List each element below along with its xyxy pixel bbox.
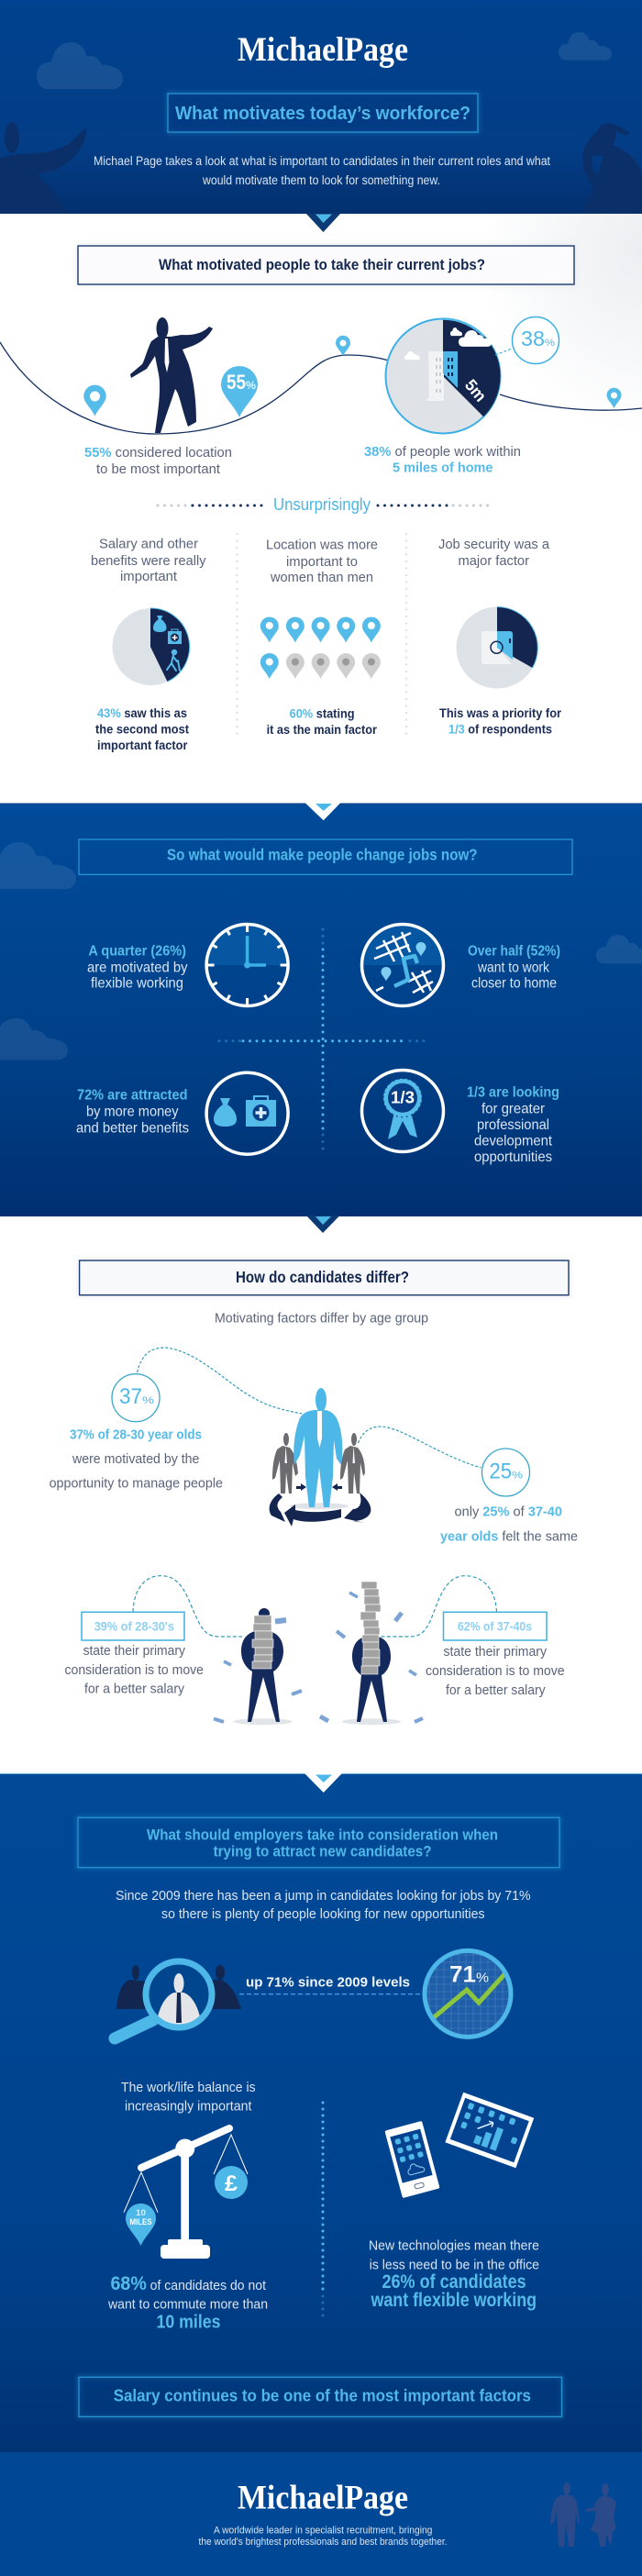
logo: MichaelPage	[238, 31, 408, 69]
icon: balance scales	[124, 2128, 248, 2259]
icon: small pin left	[83, 385, 106, 416]
text: 68% commute	[107, 2273, 268, 2332]
figure: man with small stack	[234, 1608, 293, 1725]
icon: money bag	[153, 616, 167, 632]
callout: 37%: 37	[119, 1384, 142, 1409]
text: 37% caption	[50, 1427, 223, 1492]
icon: walker	[167, 650, 180, 671]
arrow: into section	[305, 803, 340, 820]
chart: 71% growth circle: 71	[449, 1962, 476, 1988]
chart: security pie 1/3	[457, 607, 537, 688]
panel: what should employers consider	[0, 1773, 642, 2452]
text: 60% caption	[267, 706, 377, 737]
column: job security	[438, 537, 561, 736]
text: professional development	[467, 1084, 559, 1165]
figure: silhouette right	[209, 1965, 241, 2009]
callout: 37%	[112, 1348, 302, 1422]
text: 38% within 5 miles: 38% of people work within	[364, 444, 521, 460]
text: 62% caption: state their primary	[444, 1644, 547, 1660]
cloud: header right	[559, 32, 612, 61]
arrow: into section	[304, 1773, 342, 1793]
callout: 38% circle: 38	[521, 327, 545, 350]
text: new technologies: 26% of candidates	[382, 2271, 526, 2293]
section heading: How do candidates differ?	[236, 1268, 409, 1286]
text: flexible working: are motivated by	[87, 960, 187, 975]
icon: award ribbon: 1/3	[391, 1089, 415, 1107]
text: 55% location: 55% considered location	[84, 445, 232, 461]
section heading	[78, 1817, 559, 1868]
text: professional development: 1/3 are looking	[467, 1084, 559, 1100]
column: location	[260, 538, 381, 737]
text: 1/3 caption: 1/3 of respondents	[448, 721, 552, 736]
panel: header	[0, 0, 642, 215]
text: 62% caption	[426, 1644, 565, 1698]
connector: up 71%: up 71% since 2009 levels	[246, 1975, 410, 1991]
text: 37% caption: opportunity to manage people	[50, 1476, 223, 1492]
icon: smartphone	[384, 2121, 440, 2198]
icon: 10 miles pin	[126, 2204, 156, 2246]
text: money and benefits: 72% are attracted	[77, 1088, 187, 1104]
text: work/life balance	[121, 2080, 256, 2115]
icon: 10 miles pin: MILES	[130, 2217, 152, 2226]
text: 39% caption	[64, 1643, 204, 1697]
text: tagline: the world's brightest professionals and best brands together.	[198, 2537, 448, 2548]
icon: small pin right	[607, 388, 622, 408]
text: 68% commute: want to commute more than	[107, 2297, 268, 2313]
title box	[168, 94, 478, 132]
text: location heading: women than men	[270, 570, 373, 585]
chart: wavy road line	[0, 342, 642, 434]
item: flexible working	[87, 925, 289, 1005]
text: work/life balance: increasingly important	[125, 2099, 252, 2115]
clouds: section background	[0, 842, 642, 1060]
text: salary heading: benefits were really	[91, 553, 206, 569]
callout: 39% salary: 39% of 28-30's	[94, 1619, 174, 1634]
icon: building	[426, 351, 458, 401]
text: tagline: A worldwide leader in specialist recruitment, bringing	[214, 2526, 432, 2537]
text: closer to home: closer to home	[471, 976, 557, 992]
icon: pound weight	[215, 2166, 248, 2199]
icon: 55% pin: 55	[227, 371, 246, 394]
section heading	[79, 839, 572, 874]
callout: 25%: %	[512, 1471, 523, 1482]
icon: award ribbon	[361, 1070, 444, 1152]
section heading: So what would make people change jobs now?	[167, 846, 477, 864]
text: 39% caption: state their primary	[83, 1643, 185, 1659]
text: 39% caption: consideration is to move	[64, 1662, 204, 1678]
figure: grey man left	[272, 1433, 298, 1493]
text: tagline	[198, 2526, 448, 2548]
text: 38% within 5 miles: 5 miles of home	[393, 461, 493, 475]
text: professional development: professional	[477, 1117, 549, 1133]
icon: 55% pin: %	[246, 379, 256, 392]
icon: map	[360, 925, 445, 1005]
figure: blue manager	[293, 1388, 342, 1507]
text: job security heading: major factor	[459, 553, 529, 569]
text: intro paragraph: Since 2009 there has been a jump in candidates looking for jobs by 71%	[116, 1888, 531, 1904]
text: 43% caption: important factor	[97, 738, 188, 752]
divider: Unsurprisingly: Unsurprisingly	[273, 495, 371, 514]
figure: silhouette left	[116, 1965, 147, 2009]
text: location heading	[266, 538, 378, 585]
figure: grey man right	[340, 1433, 365, 1493]
figure: man balancing	[130, 317, 213, 433]
icon: circular arrows	[270, 1483, 371, 1527]
conclusion box	[79, 2377, 561, 2416]
text: professional development: development	[474, 1133, 553, 1149]
text: 68% commute: 68% of candidates do not	[110, 2273, 267, 2294]
icon: magnifier on candidates	[115, 1961, 241, 2038]
text: 25% caption	[440, 1505, 578, 1544]
silhouette: footer couple	[550, 2482, 616, 2547]
icon: clouds in pie	[404, 328, 492, 360]
text: new technologies: want flexible working	[371, 2290, 537, 2311]
text: 43% caption: the second most	[95, 721, 189, 736]
text: 1/3 caption	[439, 705, 561, 736]
text: 60% caption: it as the main factor	[267, 722, 377, 737]
callout: 62% salary	[381, 1576, 547, 1640]
text: new technologies: New technologies mean there	[369, 2238, 539, 2254]
icon: 55% pin	[221, 366, 258, 417]
text: money and benefits: by more money	[86, 1105, 179, 1120]
text: 25% caption: only 25% of 37-40	[455, 1505, 562, 1520]
icon: clock	[206, 925, 289, 1005]
icon: money bag and first aid	[206, 1072, 288, 1154]
text: money and benefits	[76, 1088, 189, 1136]
panel: what motivated people	[0, 214, 642, 804]
text: 37% caption: 37% of 28-30 year olds	[70, 1427, 202, 1442]
callout: 25%	[359, 1427, 530, 1496]
chart: 38% pie with building	[385, 318, 501, 433]
text: age group subtitle: Motivating factors differ by age group	[215, 1311, 428, 1327]
chart: 71% growth circle: %	[476, 1971, 489, 1986]
text: money and benefits: and better benefits	[76, 1120, 189, 1136]
text: 55% location: to be most important	[96, 461, 221, 477]
text: intro paragraph: so there is plenty of people looking for new opportunities	[161, 1906, 485, 1922]
text: job security heading: Job security was a	[438, 537, 550, 552]
callout: 38% circle	[495, 317, 559, 363]
text: 25% caption: year olds felt the same	[440, 1528, 578, 1544]
figure: man with tall stack	[342, 1582, 401, 1725]
text: 62% caption: for a better salary	[446, 1682, 546, 1698]
text: closer to home: want to work	[477, 960, 550, 975]
text: flexible working: A quarter (26%)	[88, 944, 186, 960]
text: 62% caption: consideration is to move	[426, 1663, 565, 1679]
silhouette: man waving	[0, 122, 86, 214]
icon: small pin top	[336, 336, 350, 356]
intro text	[94, 154, 550, 187]
item: closer to home	[360, 925, 560, 1005]
callout: 39% salary	[82, 1576, 242, 1640]
text: 38% within 5 miles	[364, 444, 521, 475]
label: 5m: 5m	[461, 376, 490, 405]
text: new technologies: is less need to be in the office	[370, 2257, 539, 2272]
text: location heading: Location was more	[266, 538, 378, 553]
text: salary heading: Salary and other	[99, 537, 198, 552]
arrow: into section	[306, 1216, 339, 1233]
panel: how do candidates differ	[0, 1216, 642, 1773]
panel: footer	[0, 2452, 642, 2576]
text: 68% commute: 10 miles	[156, 2312, 220, 2332]
icon: scattered papers	[214, 1593, 423, 1722]
section heading: What motivated people to take their current jobs?	[159, 256, 485, 273]
section heading	[80, 1260, 569, 1295]
text: 37% caption: were motivated by the	[72, 1451, 199, 1467]
text: 43% caption: 43% saw this as	[97, 705, 187, 720]
arrow: header to section	[306, 214, 340, 232]
silhouette: woman with raised arm	[581, 123, 642, 214]
text: intro paragraph	[116, 1888, 531, 1922]
section heading: What should employers take into consideration when	[147, 1827, 498, 1844]
intro text: Michael Page takes a look at what is important to candidates in their current roles and what	[94, 154, 550, 168]
icon: 10 miles pin: 10	[136, 2208, 146, 2217]
callout: 38% circle: %	[545, 338, 555, 349]
text: 60% caption: 60% stating	[290, 706, 355, 721]
intro text: would motivate them to look for something new.	[202, 173, 440, 187]
callout: 37%: %	[142, 1395, 154, 1406]
text: 43% caption	[95, 705, 189, 752]
chart: pin pictogram 60%	[260, 616, 381, 679]
text: work/life balance: The work/life balance is	[121, 2080, 256, 2095]
title box: What motivates today’s workforce?	[175, 104, 470, 124]
text: location heading: important to	[286, 554, 358, 570]
text: flexible working: flexible working	[91, 976, 183, 992]
text: closer to home: Over half (52%)	[468, 944, 560, 960]
panel: change jobs now	[0, 803, 642, 1216]
text: job security heading	[438, 537, 550, 569]
section heading: trying to attract new candidates?	[214, 1842, 431, 1860]
icon: tablet	[445, 2093, 534, 2168]
text: flexible working	[87, 944, 187, 992]
text: 39% caption: for a better salary	[84, 1682, 184, 1697]
section heading	[78, 246, 574, 284]
text: 1/3 caption: This was a priority for	[439, 705, 561, 720]
column: salary	[91, 537, 206, 752]
text: closer to home	[468, 944, 560, 992]
logo: MichaelPage	[238, 2479, 408, 2516]
text: salary heading: important	[120, 569, 178, 584]
icon: first aid	[168, 629, 182, 644]
text: professional development: opportunities	[474, 1149, 552, 1165]
icon: pound weight: £	[225, 2171, 238, 2196]
callout: 25%: 25	[490, 1460, 512, 1484]
dotted cross divider	[219, 929, 430, 1149]
figure: manager with team	[270, 1388, 371, 1527]
cloud: header left	[37, 42, 123, 89]
text: salary heading	[91, 537, 206, 584]
icon: safe	[482, 631, 513, 664]
text: professional development: for greater	[482, 1101, 546, 1116]
chart: salary pie 43%	[112, 608, 190, 685]
chart: 71% growth circle	[422, 1949, 514, 2040]
conclusion box: Salary continues to be one of the most important factors	[114, 2387, 531, 2405]
item: money and benefits	[76, 1072, 288, 1154]
callout: 62% salary: 62% of 37-40s	[458, 1619, 532, 1634]
text: 55% location	[84, 445, 232, 477]
text: new technologies	[369, 2238, 539, 2311]
item: professional development	[361, 1070, 559, 1165]
